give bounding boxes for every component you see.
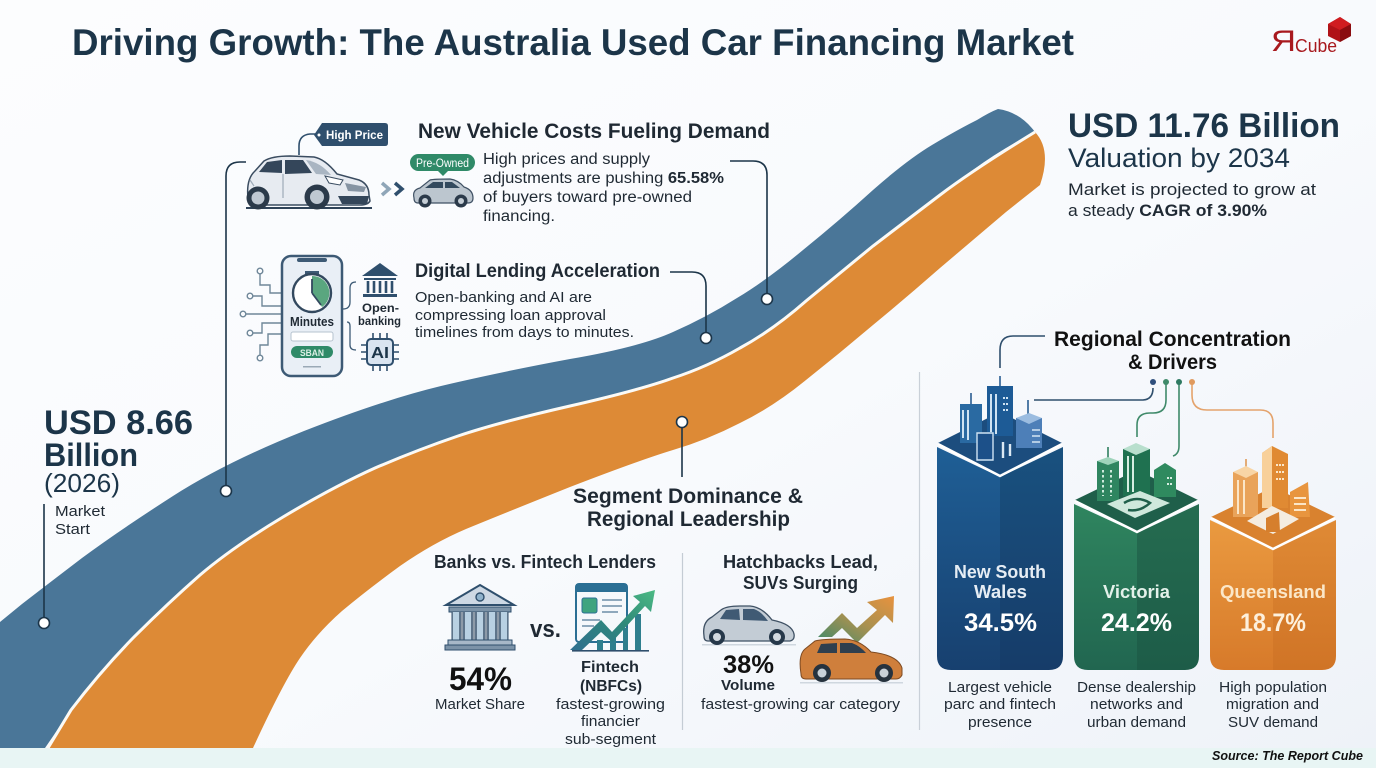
icon: NSW skyline bbox=[960, 376, 1042, 460]
pillar bbox=[937, 412, 1063, 670]
panel: banks vs fintech bbox=[434, 551, 665, 748]
text block: digital lending bbox=[415, 260, 660, 341]
connector: heading to NSW bbox=[1000, 336, 1045, 368]
icon: Victoria skyline bbox=[1097, 443, 1176, 518]
caption: Queensland: High population bbox=[1219, 679, 1327, 696]
icon: phone with stopwatch bbox=[282, 256, 342, 376]
pillar bbox=[1210, 487, 1336, 670]
stat: fintech bbox=[556, 659, 665, 748]
heading: hatchbacks bbox=[723, 551, 878, 593]
text block: new vehicle costs: of buyers toward pre-owned bbox=[483, 189, 692, 206]
icon: AI chip: AI bbox=[371, 345, 389, 362]
icon: open-banking bbox=[343, 263, 401, 350]
label: Victoria: Victoria bbox=[1103, 581, 1171, 602]
icon: Queensland skyline bbox=[1233, 446, 1310, 534]
label: NSW: 34.5% bbox=[964, 609, 1037, 637]
connector: NSW dot bbox=[1034, 379, 1156, 400]
end value callout: Market is projected to grow at bbox=[1068, 180, 1316, 199]
icon: pre-owned pill: Pre-Owned bbox=[416, 158, 469, 170]
panel: hatchbacks and SUVs bbox=[701, 551, 903, 713]
label: Queensland: Queensland bbox=[1220, 581, 1326, 602]
stat: hatchback volume: Volume bbox=[721, 677, 775, 694]
marker: heading connector to curve bbox=[730, 161, 772, 304]
icon: small pre-owned car bbox=[414, 179, 473, 208]
icon: growth arrow bbox=[818, 596, 894, 643]
heading: regional concentration bbox=[1054, 328, 1291, 374]
stat: hatchback volume bbox=[701, 651, 901, 713]
text block: digital lending: timelines from days to minutes. bbox=[415, 324, 634, 341]
logo: RCube bbox=[1271, 17, 1351, 58]
icon: orange SUV bbox=[800, 639, 903, 684]
logo: RCube: Я bbox=[1271, 25, 1296, 58]
icon: AI chip bbox=[361, 333, 399, 371]
caption: Queensland: SUV demand bbox=[1228, 714, 1318, 731]
marker: segment connector bbox=[676, 416, 688, 477]
icon: fintech growth bbox=[570, 584, 655, 652]
text block: digital lending: compressing loan approval bbox=[415, 307, 606, 324]
text block: digital lending: Open-banking and AI are bbox=[415, 289, 592, 306]
text block: digital lending: Digital Lending Acceleration bbox=[415, 260, 660, 282]
icon: high price tag bbox=[299, 123, 388, 155]
logo: RCube: Cube bbox=[1295, 36, 1337, 56]
label: Queensland bbox=[1220, 581, 1326, 637]
icon: phone with stopwatch: Minutes bbox=[290, 315, 334, 329]
heading: segment dominance: Regional Leadership bbox=[587, 508, 790, 531]
caption: Victoria bbox=[1077, 679, 1196, 731]
label: Queensland: 18.7% bbox=[1240, 609, 1306, 637]
heading: segment dominance: Segment Dominance & bbox=[573, 485, 803, 508]
text block: new vehicle costs: adjustments are pushing 65.58% bbox=[483, 170, 724, 187]
icon: open-banking: Open- bbox=[362, 303, 399, 315]
title: Driving Growth: The Australia Used Car Financing Market bbox=[72, 22, 1074, 63]
stat: fintech: Fintech bbox=[581, 659, 639, 676]
end value callout bbox=[1068, 107, 1340, 220]
caption: NSW bbox=[944, 679, 1056, 731]
stat: fintech: financier bbox=[581, 713, 640, 730]
text block: new vehicle costs: High prices and supply bbox=[483, 151, 650, 168]
marker: new vehicle costs connector bbox=[220, 162, 246, 496]
icon: white SUV bbox=[246, 156, 372, 210]
icon: phone with stopwatch: SBAN bbox=[300, 348, 324, 359]
start value callout: (2026) bbox=[44, 468, 120, 498]
label: NSW bbox=[954, 561, 1046, 637]
heading: hatchbacks: Hatchbacks Lead, bbox=[723, 551, 878, 572]
label: Victoria: 24.2% bbox=[1101, 609, 1172, 637]
icon: pre-owned pill bbox=[410, 154, 475, 176]
caption: Queensland bbox=[1219, 679, 1327, 731]
caption: Victoria: urban demand bbox=[1087, 714, 1186, 731]
start value callout: USD 8.66 bbox=[44, 404, 193, 442]
start value callout: Billion bbox=[44, 437, 138, 473]
connector: Queensland dot bbox=[1189, 379, 1273, 438]
icon: hatchback bbox=[702, 606, 796, 646]
heading: regional concentration: Regional Concentration bbox=[1054, 328, 1291, 351]
heading: regional concentration: & Drivers bbox=[1128, 351, 1217, 374]
end value callout: Valuation by 2034 bbox=[1068, 143, 1290, 173]
marker: market start bbox=[38, 504, 50, 628]
icon: open-banking: banking bbox=[358, 316, 401, 328]
label: vs: vs. bbox=[530, 616, 561, 643]
end value callout: a steady CAGR of 3.90% bbox=[1068, 201, 1267, 220]
heading: banks vs fintech: Banks vs. Fintech Lenders bbox=[434, 551, 656, 572]
end value callout: USD 11.76 Billion bbox=[1068, 107, 1340, 145]
icon: chevrons bbox=[382, 183, 402, 195]
caption: Victoria: networks and bbox=[1090, 696, 1183, 713]
ribbon: orange market curve bbox=[48, 132, 1045, 748]
label: NSW: New South bbox=[954, 561, 1046, 582]
start value callout bbox=[44, 404, 193, 538]
stat: fintech: (NBFCs) bbox=[580, 678, 642, 695]
stat: bank share: Market Share bbox=[435, 696, 525, 713]
heading: segment dominance bbox=[573, 485, 803, 531]
caption: Queensland: migration and bbox=[1226, 696, 1319, 713]
caption: Victoria: Dense dealership bbox=[1077, 679, 1196, 696]
caption: NSW: Largest vehicle bbox=[948, 679, 1052, 696]
heading: hatchbacks: SUVs Surging bbox=[743, 572, 858, 593]
caption: NSW: parc and fintech bbox=[944, 696, 1056, 713]
stat: hatchback volume: fastest-growing car category bbox=[701, 696, 901, 713]
text block: new vehicle costs: New Vehicle Costs Fueling Demand bbox=[418, 120, 770, 143]
stat: bank share: 54% bbox=[449, 661, 512, 697]
stat: fintech: sub-segment bbox=[565, 731, 657, 748]
stat: hatchback volume: 38% bbox=[723, 651, 774, 679]
start value callout: Start bbox=[55, 521, 91, 538]
panel: New South Wales bbox=[937, 376, 1063, 731]
pillar bbox=[1074, 470, 1199, 670]
icon: circuit lines bbox=[240, 268, 281, 361]
panel: Victoria bbox=[1074, 443, 1199, 731]
stat: bank share bbox=[435, 661, 525, 713]
stat: fintech: fastest-growing bbox=[556, 696, 665, 713]
ribbon: blue market curve bbox=[0, 109, 1035, 748]
label: NSW: Wales bbox=[974, 581, 1027, 602]
start value callout: Market bbox=[55, 503, 106, 520]
caption: NSW: presence bbox=[968, 714, 1032, 731]
text block: new vehicle costs: financing. bbox=[483, 208, 555, 225]
label: Victoria bbox=[1101, 581, 1172, 637]
text block: new vehicle costs bbox=[418, 120, 770, 225]
icon: high price tag: High Price bbox=[326, 128, 383, 142]
panel: Queensland bbox=[1210, 446, 1336, 731]
connector: Victoria dots bbox=[1137, 379, 1182, 456]
source note: Source: The Report Cube bbox=[1212, 748, 1363, 763]
icon: bank bbox=[445, 585, 515, 650]
marker: digital lending connector bbox=[670, 272, 712, 344]
